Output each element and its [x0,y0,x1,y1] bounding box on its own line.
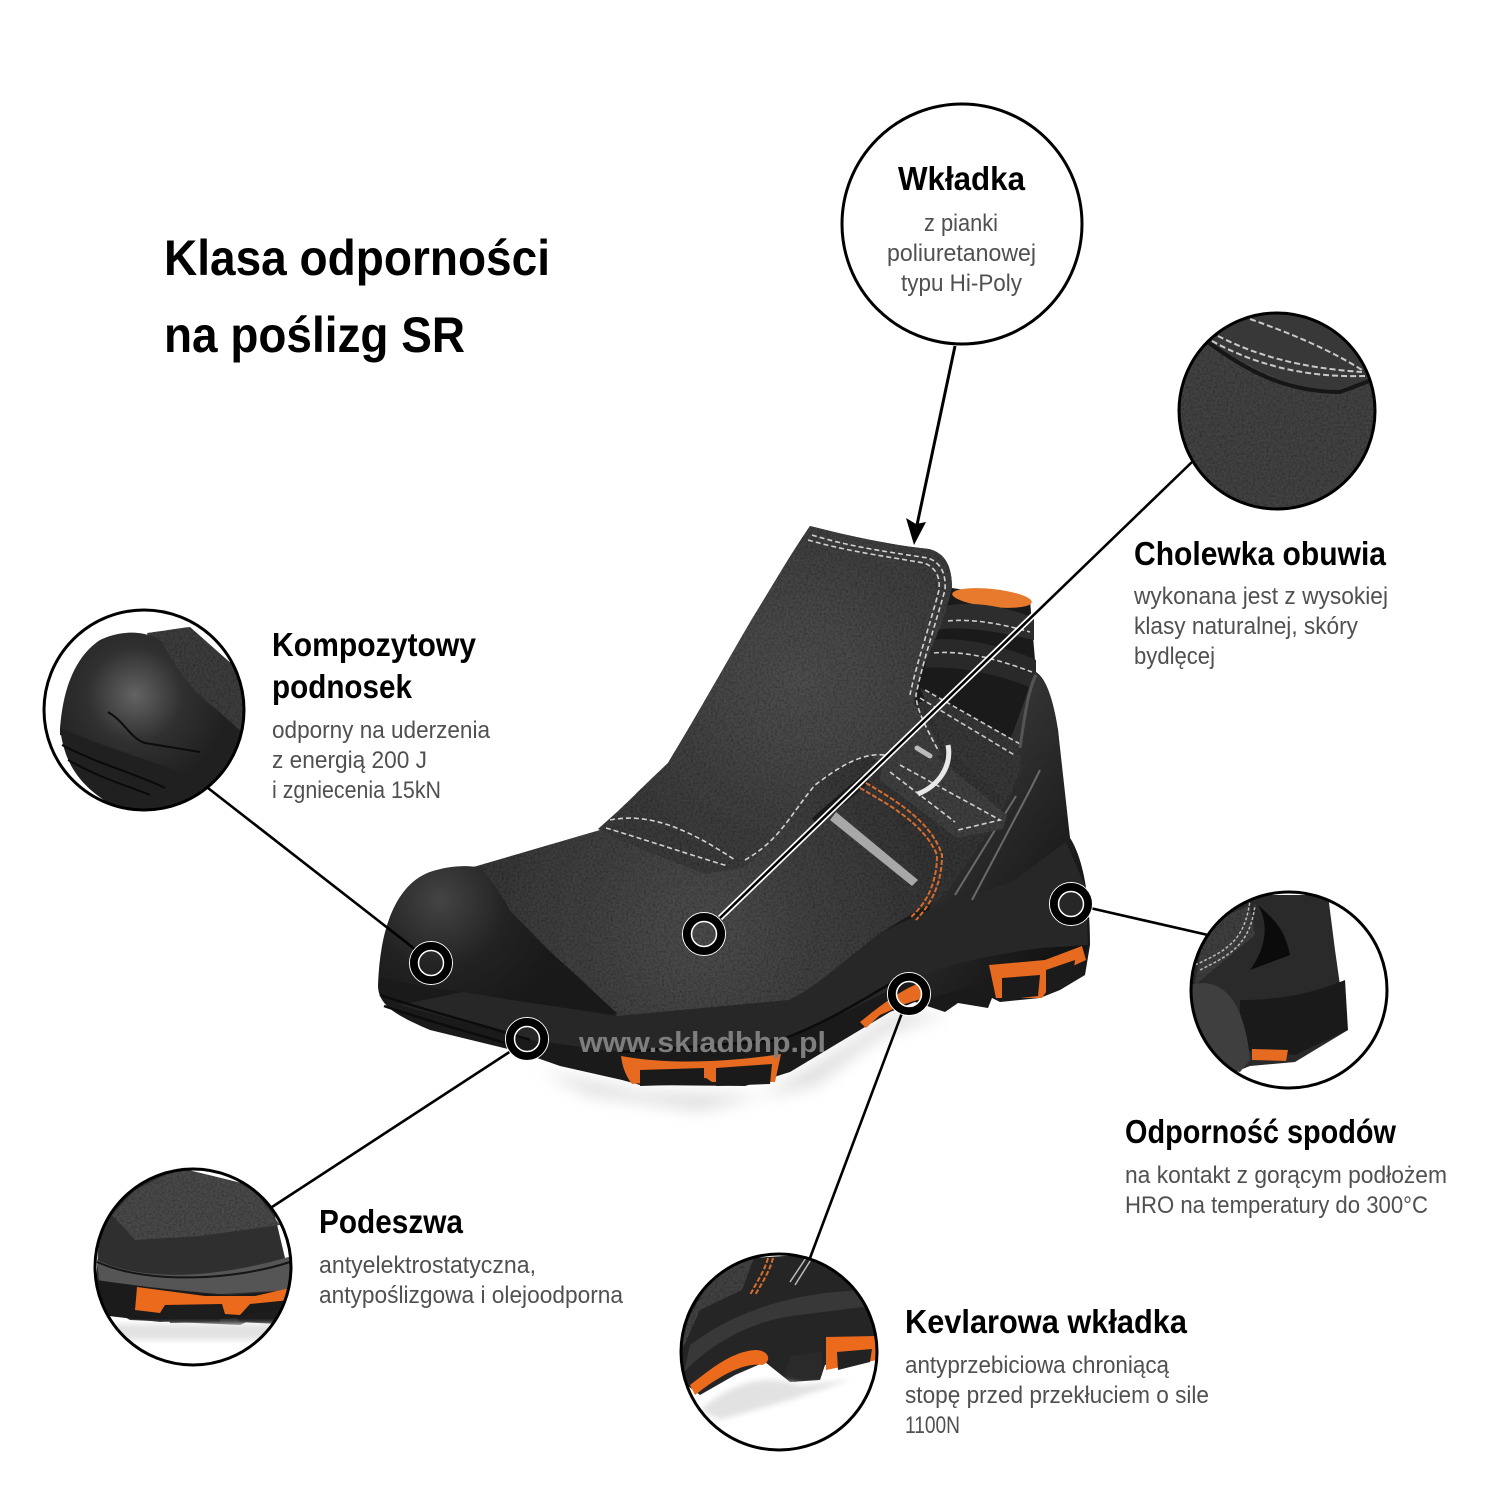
heading: toe cap [272,626,477,705]
panel: heel resistance [1125,889,1447,1219]
heading: toe cap: podnosek [272,668,413,705]
title: Klasa odporności [164,230,550,286]
leader line: kevlar [810,1013,902,1258]
midsole band [400,842,1088,1052]
heading: kevlar: Kevlarowa wkładka [905,1303,1188,1340]
description: outsole [319,1252,624,1309]
callout: insole circle [842,104,1082,344]
description: kevlar: stopę przed przekłuciem o sile [905,1382,1209,1409]
description: toe cap: z energią 200 J [272,747,427,774]
description: heel: na kontakt z gorącym podłożem [1125,1162,1447,1189]
toe cap [379,866,618,1014]
logo tag [812,775,870,826]
buckle strap [880,745,1007,838]
strap panel [920,675,1040,900]
description: upper: klasy naturalnej, skóry [1134,613,1358,640]
description: outsole: antyelektrostatyczna, [319,1252,536,1279]
detail circle: heel [1188,889,1392,1093]
orange outsole heel [989,946,1086,1000]
description: insole: z pianki [924,210,998,237]
heading: upper: Cholewka obuwia [1134,535,1387,572]
title [164,230,550,363]
heading: toe cap: Kompozytowy [272,626,477,663]
orange arch [860,982,930,1028]
watermark: www.skladbhp.pl [578,1027,826,1059]
heel counter [920,672,1088,1000]
detail circle: toe cap [40,605,250,820]
description: upper: bydlęcej [1134,643,1215,670]
description: toe cap: odporny na uderzenia [272,717,491,744]
description: kevlar: antyprzebiciowa chroniącą [905,1352,1170,1379]
description: toe cap [272,717,491,804]
flap stitching [606,535,945,866]
description: kevlar [905,1352,1209,1439]
description: toe cap: i zgniecenia 15kN [272,777,441,804]
detail circle: kevlar [679,1252,879,1452]
heading: Wkładka: Wkładka [898,160,1026,197]
leader line: insole with arrow [906,346,955,545]
panel: toe cap [40,605,491,820]
orange outsole front [621,1054,781,1086]
panel: upper [1133,309,1388,670]
collar and back quarter [925,585,1036,690]
detail circle: leather upper [1175,309,1379,513]
leader line: upper [720,462,1192,918]
description: upper: wykonana jest z wysokiej [1133,583,1388,610]
detail circle: outsole [93,1167,295,1367]
description: outsole: antypoślizgowa i olejoodporna [319,1282,624,1309]
description: insole: typu Hi-Poly [901,270,1022,297]
marker: kevlar [888,972,930,1016]
leader line: toe cap [208,788,416,950]
marker: upper [682,912,726,956]
boot silhouette [378,526,1090,1086]
marker: toe cap [410,942,452,984]
heading: heel: Odporność spodów [1125,1113,1396,1150]
marker: sole [506,1018,548,1060]
orange stitching [860,783,942,920]
panel: kevlar insert [679,1252,1209,1452]
shaft flap [598,526,952,874]
heading: outsole: Podeszwa [319,1203,464,1240]
description: insole [887,210,1036,297]
leader line: heel [1090,908,1208,935]
sole seam [380,975,905,1052]
title: na poślizg SR [164,307,465,363]
description: kevlar: 1100N [905,1412,960,1439]
description: heel [1125,1162,1447,1219]
description: heel: HRO na temperatury do 300°C [1125,1192,1428,1219]
upper vamp leather [470,700,1015,1016]
boot illustration [378,526,1090,1110]
sole shadow [540,1012,950,1110]
description: upper [1133,583,1388,670]
marker: heel [1050,882,1092,926]
panel: outsole [93,1167,624,1367]
leader line: sole [272,1051,511,1207]
description: insole: poliuretanowej [887,240,1036,267]
reflective stripe [830,812,918,886]
